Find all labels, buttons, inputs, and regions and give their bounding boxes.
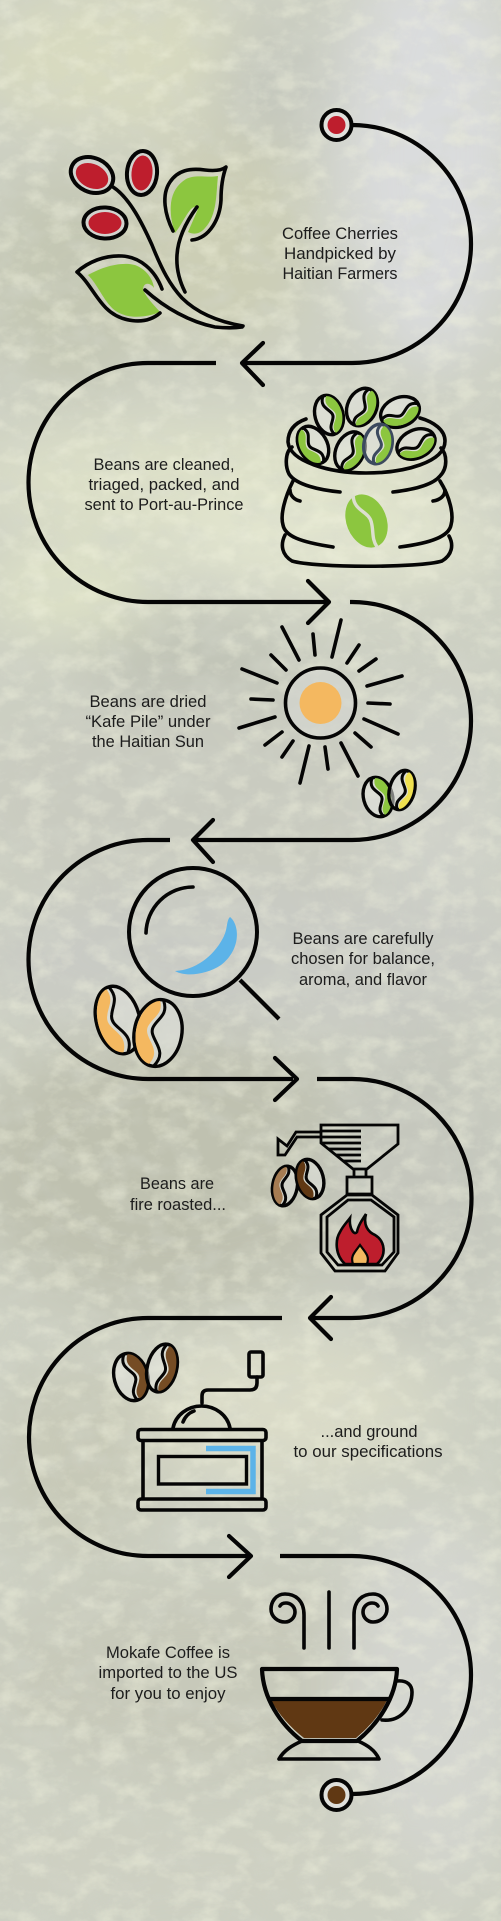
text: step 1: Haitian Farmers [282, 265, 398, 283]
brown bean right [142, 1341, 182, 1395]
text: step 3: “Kafe Pile” under [86, 713, 211, 731]
text: step 2 [84, 456, 244, 514]
green bean on sack [337, 488, 396, 554]
text: step 6: to our specifications [294, 1443, 442, 1461]
text: step 5 [130, 1175, 226, 1214]
arrow 5 [310, 1297, 331, 1339]
route segment 6 [29, 1318, 282, 1556]
text: step 5: Beans are [140, 1175, 214, 1193]
bean 7 [392, 423, 440, 465]
text: step 5: fire roasted... [130, 1196, 226, 1214]
end node [322, 1780, 352, 1810]
route segment 3 [196, 602, 471, 840]
arrow 1 [242, 343, 263, 385]
icon: roaster with flame [269, 1125, 398, 1271]
arrow 6 [229, 1536, 251, 1577]
text: step 4: Beans are carefully [292, 930, 434, 948]
route segment 4 [28, 840, 293, 1079]
arrow 4 [275, 1058, 297, 1100]
bean 5 [329, 427, 371, 475]
text: step 3: Beans are dried [90, 693, 206, 711]
text: step 7: Mokafe Coffee is [106, 1644, 230, 1662]
brown bean left [109, 1349, 153, 1405]
route segment 2 [28, 363, 326, 602]
text: step 2: sent to Port-au-Prince [84, 496, 244, 514]
text: step 3: the Haitian Sun [92, 733, 204, 751]
start node [322, 110, 352, 140]
bean 1 [310, 392, 348, 438]
bean 6 dark outline [360, 422, 396, 466]
icon: sack of green coffee beans [282, 383, 452, 566]
text: step 1: Handpicked by [284, 245, 397, 263]
text: step 4: chosen for balance, [291, 950, 435, 968]
text: step 7: imported to the US [98, 1664, 238, 1682]
route segment 7 [280, 1556, 471, 1794]
dark brown bean [292, 1156, 328, 1202]
icon: steaming coffee cup [262, 1592, 412, 1759]
text: step 4: aroma, and flavor [299, 971, 427, 989]
light brown bean [269, 1164, 301, 1208]
blue drawer bracket [206, 1448, 253, 1492]
text: step 6 [294, 1423, 442, 1461]
icon: orange beans [88, 981, 187, 1070]
arrow 2 [308, 581, 329, 623]
text: step 2: triaged, packed, and [88, 476, 240, 494]
route segment 1 [246, 125, 471, 363]
text: step 4 [291, 930, 435, 989]
bean 3 [376, 391, 424, 433]
text: step 7 [98, 1644, 238, 1703]
icon: coffee branch with cherries and leaves [65, 150, 243, 328]
text: step 7: for you to enjoy [110, 1685, 226, 1703]
arrow 3 [193, 820, 213, 862]
text: step 1: Coffee Cherries [282, 225, 398, 243]
text: step 3 [86, 693, 211, 751]
icon: green and yellow beans near sun [359, 767, 419, 820]
bean 4 [291, 421, 335, 469]
text: step 6: ...and ground [320, 1423, 418, 1441]
route segment 5 [313, 1079, 472, 1318]
serpentine route with arrows [28, 125, 471, 1794]
flame [337, 1214, 384, 1264]
icon: hand grinder [109, 1341, 266, 1510]
bean 2 [341, 383, 383, 431]
icon: magnifying glass [129, 868, 279, 1019]
icon: sun [239, 620, 402, 783]
text: step 1 [282, 225, 398, 283]
text: step 2: Beans are cleaned, [94, 456, 234, 474]
